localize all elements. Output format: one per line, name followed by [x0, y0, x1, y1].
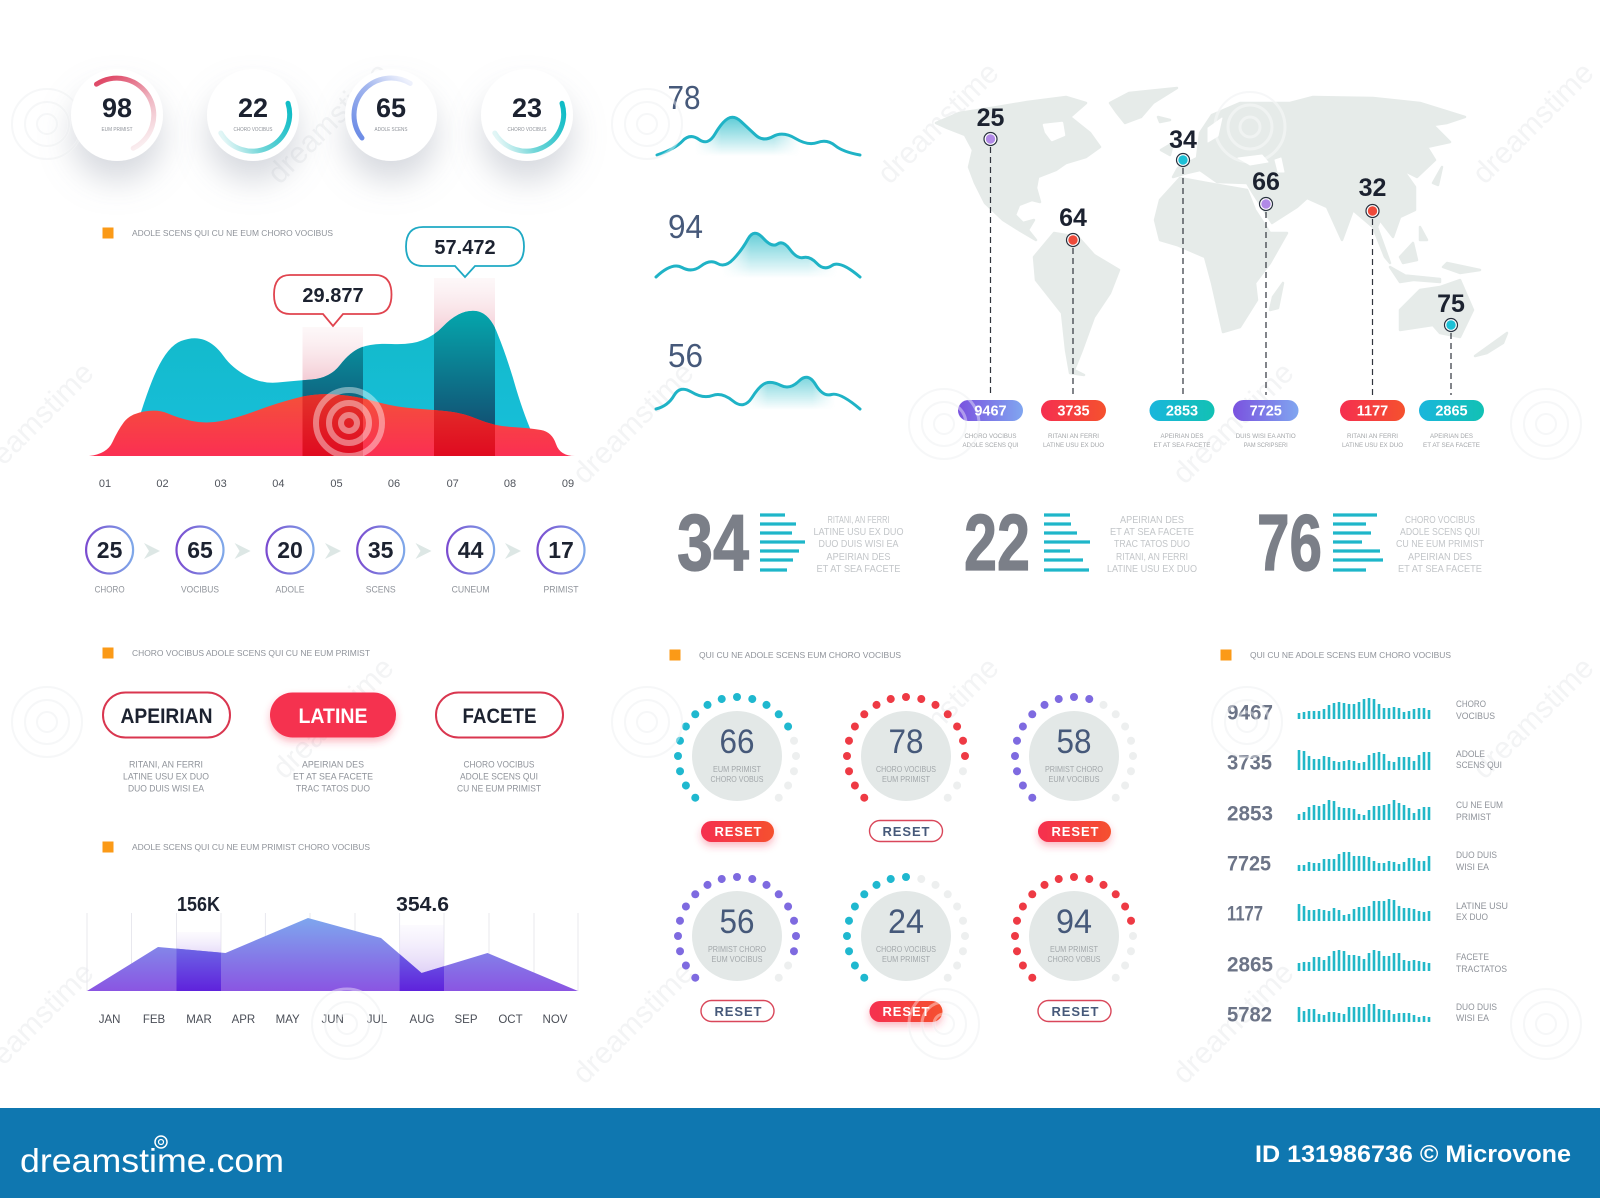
stat 76: APEIRIAN DES [1408, 551, 1472, 563]
pin 64 [1059, 204, 1087, 395]
callout: 57.472 [406, 227, 524, 277]
button LATINE: LATINE [298, 705, 368, 728]
callout: 29.877: 29.877 [302, 285, 364, 307]
pin 66 [1252, 168, 1280, 395]
button LATINE [270, 692, 396, 738]
value 156K: 156K [177, 894, 221, 916]
pill 3735: 3735 [1057, 404, 1090, 420]
stat 76 [1257, 498, 1484, 587]
stat 22: LATINE USU EX DUO [1107, 563, 1197, 575]
text: dreamstime [1166, 356, 1300, 490]
step 44 [447, 526, 494, 596]
pill 2865: 2865 [1435, 404, 1468, 420]
stat 34: LATINE USU EX DUO [814, 526, 904, 538]
month labels: APR [232, 1014, 255, 1026]
step 20: 20 [277, 537, 303, 563]
step 35 [357, 526, 404, 596]
stat 22: ET AT SEA FACETE [1110, 526, 1194, 538]
pill 2853: APEIRIAN DES [1160, 433, 1204, 440]
step 17: 17 [548, 537, 574, 563]
chart axis labels: 09 [562, 478, 574, 490]
pill 1177: 1177 [1357, 404, 1388, 420]
button descriptions: TRAC TATOS DUO [296, 784, 370, 794]
flow: step circles [86, 526, 584, 596]
row 9467 [1227, 698, 1495, 724]
text: dreamstime [871, 651, 1005, 785]
panel: bar rows [1227, 698, 1508, 1026]
hudson bay [1044, 123, 1064, 140]
row 9467: VOCIBUS [1456, 711, 1495, 722]
button descriptions: APEIRIAN DES [302, 760, 364, 770]
row 1177: 1177 [1227, 902, 1263, 926]
chart axis labels: 02 [156, 478, 169, 490]
reset filled: RESET [882, 1004, 930, 1019]
gauge 22: CHORO VOCIBUS [234, 127, 273, 133]
month labels: JUL [367, 1014, 388, 1026]
dial 56: EUM VOCIBUS [712, 955, 762, 964]
pin 75 [1437, 290, 1465, 395]
pill 2853: ET AT SEA FACETE [1154, 442, 1211, 449]
pill 2853 [1150, 400, 1214, 449]
step 17 [538, 526, 584, 596]
pin 32: 32 [1359, 174, 1386, 202]
gauge 98: EUM PRIMIST [102, 127, 133, 133]
dial 56: PRIMIST CHORO [708, 945, 766, 954]
dial 58: EUM VOCIBUS [1048, 775, 1100, 784]
gauge 22: 22 [238, 93, 268, 123]
australia [1400, 280, 1473, 337]
button descriptions: ET AT SEA FACETE [293, 772, 373, 782]
text: dreamstime [1466, 651, 1600, 785]
dial 78: EUM PRIMIST [882, 775, 930, 784]
stat 76: CHORO VOCIBUS [1405, 514, 1475, 526]
pill 9467 [958, 400, 1023, 449]
footer credit: ID 131986736 © Microvone [1255, 1141, 1571, 1168]
step 25: CHORO [95, 584, 125, 596]
spark 78 [656, 86, 862, 156]
new zealand [1475, 333, 1507, 356]
pill 3735: RITANI AN FERRI [1048, 433, 1099, 440]
stat 34: RITANI, AN FERRI [828, 514, 890, 526]
legend: bar rows: QUI CU NE ADOLE SCENS EUM CHORO VOCIBUS [1250, 650, 1451, 660]
dial 24 [843, 873, 969, 983]
step 17: PRIMIST [544, 584, 579, 596]
button descriptions: RITANI, AN FERRI [129, 760, 203, 770]
gauge 98 [71, 69, 163, 161]
dial 78 [843, 693, 969, 803]
month labels: OCT [498, 1014, 523, 1026]
callout: 29.877 [274, 275, 392, 326]
pill 7725 [1233, 400, 1298, 449]
stat 22: APEIRIAN DES [1120, 514, 1184, 526]
legend: purple chart: ADOLE SCENS QUI CU NE EUM PRIMIST CHORO VOCIBUS [132, 842, 370, 852]
dial 24: EUM PRIMIST [882, 955, 930, 964]
arrow [416, 543, 432, 559]
stat 76: CU NE EUM PRIMIST [1396, 538, 1484, 550]
step 35: 35 [368, 537, 394, 563]
panel: line sparks [656, 79, 860, 413]
greenland [1110, 88, 1177, 123]
dial 78: 78 [888, 723, 924, 761]
reset outline: RESET [714, 1004, 762, 1019]
legend: dials: QUI CU NE ADOLE SCENS EUM CHORO VOCIBUS [699, 650, 901, 660]
dial 56: 56 [720, 903, 754, 941]
chart axis labels: 07 [447, 478, 459, 490]
row 2853: PRIMIST [1456, 812, 1491, 823]
dial 78: CHORO VOCIBUS [876, 765, 936, 774]
dial 58 [1011, 693, 1137, 803]
panel: pill buttons [103, 692, 563, 794]
dial 56 [674, 873, 800, 983]
arrow [235, 543, 251, 559]
pin 32 [1359, 174, 1386, 395]
step 65 [176, 526, 224, 596]
gauge 23 [481, 69, 573, 161]
pill 2853: 2853 [1166, 404, 1198, 420]
pill 2865: ET AT SEA FACETE [1423, 442, 1481, 449]
panel: dials [674, 693, 1137, 983]
step 44: CUNEUM [452, 584, 490, 596]
spark 56: 56 [668, 337, 703, 374]
map value pills [958, 400, 1484, 449]
spark 78: 78 [668, 79, 700, 116]
world map [936, 88, 1507, 375]
map pins [977, 104, 1465, 395]
row 9467: 9467 [1227, 702, 1273, 724]
row 5782: 5782 [1227, 1004, 1272, 1026]
pill 9467: CHORO VOCIBUS [964, 433, 1017, 440]
reset filled [870, 1001, 942, 1022]
black sea [1208, 118, 1284, 172]
stat 22: 22 [964, 498, 1030, 587]
row 5782: DUO DUIS [1456, 1002, 1497, 1013]
button descriptions: CHORO VOCIBUS [464, 760, 534, 770]
dial 66: 66 [720, 723, 754, 761]
button FACETE [436, 692, 563, 738]
row 2853 [1227, 800, 1503, 826]
step 65: 65 [187, 537, 213, 563]
step 65: VOCIBUS [181, 584, 219, 596]
text: dreamstime [871, 56, 1005, 190]
button descriptions: CU NE EUM PRIMIST [457, 784, 541, 794]
pin 64: 64 [1059, 204, 1087, 232]
chart axis labels: 08 [504, 478, 516, 490]
stat 76: ADOLE SCENS QUI [1400, 526, 1480, 538]
legend: buttons: CHORO VOCIBUS ADOLE SCENS QUI CU NE EUM PRIMIST [132, 648, 370, 658]
spark 94 [654, 214, 862, 279]
pill 9467: ADOLE SCENS QUI [962, 442, 1019, 449]
button descriptions: ADOLE SCENS QUI [460, 772, 538, 782]
area chart [89, 278, 575, 456]
callout: 57.472: 57.472 [434, 237, 496, 259]
button APEIRIAN [103, 692, 230, 738]
reset outline [701, 1000, 774, 1022]
text: dreamstime [1466, 56, 1600, 190]
pill 9467: 9467 [974, 404, 1007, 420]
dial 66: CHORO VOBUS [710, 775, 764, 784]
footer bar [0, 1108, 1600, 1198]
row 2853: 2853 [1227, 802, 1273, 826]
madagascar [1270, 283, 1283, 310]
pin 25: 25 [977, 104, 1004, 132]
panel: gauge circles [71, 69, 573, 161]
arrow [144, 543, 160, 559]
button descriptions [123, 760, 541, 794]
arrow [505, 543, 521, 559]
pill 1177 [1340, 400, 1405, 449]
dial 58: PRIMIST CHORO [1045, 765, 1103, 774]
chart axis labels: 03 [214, 478, 227, 490]
dial 66: EUM PRIMIST [713, 765, 761, 774]
month labels: SEP [454, 1014, 478, 1026]
row 2853: CU NE EUM [1456, 800, 1503, 811]
reset filled: RESET [714, 824, 762, 839]
step 35: SCENS [366, 584, 396, 596]
row 2865: TRACTATOS [1456, 964, 1507, 975]
row 3735: ADOLE [1456, 749, 1485, 760]
stat 22: RITANI, AN FERRI [1116, 551, 1188, 563]
stat 34: APEIRIAN DES [826, 551, 890, 563]
dial 94: CHORO VOBUS [1048, 955, 1100, 964]
gauge 23: 23 [512, 93, 542, 123]
chart axis labels: 04 [272, 478, 285, 490]
stat 34: 34 [677, 498, 749, 587]
step 25: 25 [97, 537, 123, 563]
spark 56 [656, 337, 860, 413]
pin 75: 75 [1437, 290, 1465, 318]
gauge 22 [207, 69, 299, 161]
month labels [99, 1014, 568, 1026]
button APEIRIAN: APEIRIAN [120, 705, 212, 728]
row 3735: SCENS QUI [1456, 760, 1502, 771]
stat 76: ET AT SEA FACETE [1398, 563, 1482, 575]
dial 24: 24 [888, 903, 924, 941]
button descriptions: LATINE USU EX DUO [123, 772, 209, 782]
gauge 65 [345, 69, 437, 161]
row 1177 [1227, 899, 1508, 926]
month labels: NOV [543, 1014, 568, 1026]
month labels: MAR [186, 1014, 212, 1026]
row 3735 [1227, 749, 1502, 774]
chart axis labels [99, 478, 574, 490]
row 1177: EX DUO [1456, 912, 1488, 923]
reset filled [1038, 821, 1111, 842]
reset outline: RESET [882, 824, 930, 839]
reset outline: RESET [1052, 1004, 1099, 1019]
gauge 98: 98 [102, 93, 132, 123]
pin 66: 66 [1252, 168, 1280, 196]
islands [1158, 117, 1480, 282]
row 3735: 3735 [1227, 752, 1272, 774]
gauge 23: CHORO VOCIBUS [508, 127, 547, 133]
row 7725: WISI EA [1456, 862, 1490, 873]
row 2865: FACETE [1456, 952, 1489, 963]
stat 76: 76 [1257, 498, 1322, 587]
purple area chart [87, 894, 578, 1026]
pill 2865 [1419, 400, 1484, 449]
pill 7725: DUIS WISI EA ANTIO [1236, 433, 1296, 440]
pill 1177: RITANI AN FERRI [1347, 433, 1398, 440]
pill 7725: PAM SCRIPSERI [1244, 442, 1288, 449]
pill 3735: LATINE USU EX DUO [1043, 442, 1104, 449]
row 7725: 7725 [1227, 852, 1271, 876]
text: dreamstime [566, 956, 700, 1090]
spark 94: 94 [668, 208, 703, 245]
row 7725 [1227, 850, 1497, 876]
row 2865 [1227, 950, 1507, 976]
reset filled: RESET [1052, 824, 1099, 839]
pin 34 [1169, 126, 1197, 395]
legend: area chart: ADOLE SCENS QUI CU NE EUM CHORO VOCIBUS [132, 228, 333, 238]
pill 7725: 7725 [1250, 404, 1282, 420]
footer logo: dreamstime.com [20, 1142, 284, 1179]
chart axis labels: 05 [330, 478, 343, 490]
pin 34: 34 [1169, 126, 1197, 154]
south america [1034, 233, 1119, 375]
step 25 [86, 526, 133, 596]
dial 24: CHORO VOCIBUS [876, 945, 936, 954]
dial 66 [674, 693, 800, 803]
pin 25 [977, 104, 1004, 395]
row 7725: DUO DUIS [1456, 850, 1497, 861]
arrow [325, 543, 341, 559]
stat 22 [964, 498, 1197, 587]
reset filled [701, 821, 774, 842]
dial 94: EUM PRIMIST [1050, 945, 1098, 954]
month labels: JUN [322, 1014, 344, 1026]
panel: reset buttons [701, 820, 1111, 1022]
row 5782: WISI EA [1456, 1013, 1490, 1024]
text: dreamstime [266, 651, 400, 785]
button descriptions: DUO DUIS WISI EA [128, 784, 205, 794]
text: dreamstime [566, 356, 700, 490]
month labels: JAN [99, 1014, 120, 1026]
row 9467: CHORO [1456, 699, 1486, 710]
stat 34 [677, 498, 904, 587]
stat 34: ET AT SEA FACETE [816, 563, 900, 575]
value 354.6: 354.6 [396, 894, 449, 916]
month labels: FEB [143, 1014, 166, 1026]
pill 1177: LATINE USU EX DUO [1342, 442, 1403, 449]
dial 94: 94 [1056, 903, 1092, 941]
pill 2865: APEIRIAN DES [1430, 433, 1474, 440]
north america [936, 97, 1100, 240]
row 2865: 2865 [1227, 954, 1273, 976]
step 44: 44 [458, 537, 484, 563]
chart axis labels: 01 [99, 478, 111, 490]
pill 3735 [1041, 400, 1106, 449]
row 5782 [1227, 1002, 1497, 1026]
reset outline [1038, 1000, 1111, 1022]
africa [1155, 178, 1287, 332]
text: dreamstime [261, 56, 395, 190]
gauge 65: ADOLE SCENS [374, 127, 408, 133]
month labels: MAY [276, 1014, 300, 1026]
text: dreamstime [1166, 956, 1300, 1090]
stat 22: TRAC TATOS DUO [1114, 538, 1190, 550]
step 20 [266, 526, 314, 596]
stat 34: DUO DUIS WISI EA [818, 538, 898, 550]
dial 58: 58 [1056, 723, 1092, 761]
step 20: ADOLE [276, 584, 304, 596]
month labels: AUG [410, 1014, 435, 1026]
panel: big stats [677, 498, 1484, 587]
eurasia [1173, 97, 1465, 263]
reset outline [870, 820, 942, 842]
dial 94 [1011, 873, 1137, 983]
button FACETE: FACETE [462, 705, 536, 728]
row 1177: LATINE USU [1456, 901, 1508, 912]
gauge 65: 65 [376, 93, 406, 123]
chart axis labels: 06 [388, 478, 400, 490]
